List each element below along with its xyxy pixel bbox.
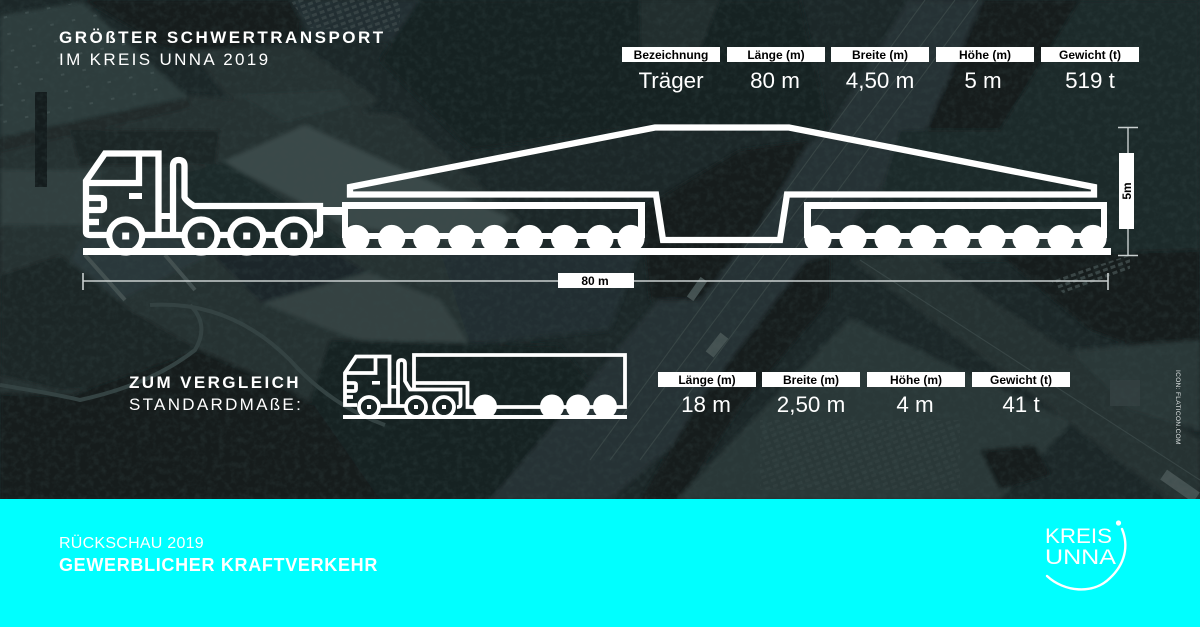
footer text: RÜCKSCHAU 2019: [59, 534, 204, 552]
footer band: [0, 499, 1200, 627]
icon: front trailer: [342, 202, 645, 252]
icon: tractor unit: [86, 154, 346, 252]
dimension: height 5 m: 5m: [1120, 182, 1134, 200]
title: [59, 28, 386, 69]
dimension: length 80 m: [83, 273, 1108, 290]
illustration: heavy transport truck with girder: [83, 128, 1111, 255]
data table: standard truck: 18 m: [681, 392, 731, 417]
data table: standard truck: Höhe (m): [890, 373, 942, 387]
comparison heading: STANDARDMAßE:: [129, 395, 303, 414]
dimension: height 5 m: [1118, 128, 1138, 256]
footer text: GEWERBLICHER KRAFTVERKEHR: [59, 555, 378, 575]
data table: heavy transport: Bezeichnung: [634, 48, 708, 62]
data table: standard truck: 41 t: [1002, 392, 1040, 417]
data table: heavy transport: Länge (m): [747, 48, 805, 62]
data table: heavy transport: Höhe (m): [959, 48, 1011, 62]
logo: Kreis Unna: UNNA: [1045, 546, 1116, 569]
data table: heavy transport: 80 m: [750, 68, 800, 93]
title: IM KREIS UNNA 2019: [59, 50, 270, 69]
ground line: [83, 248, 1111, 255]
logo: Kreis Unna: [1045, 520, 1125, 589]
illustration: standard truck: [343, 355, 627, 419]
data table: heavy transport: 4,50 m: [846, 68, 914, 93]
wheels: [109, 220, 142, 252]
data table: standard truck: Länge (m): [678, 373, 736, 387]
data table: standard truck: Breite (m): [783, 373, 839, 387]
footer text: [59, 534, 378, 575]
dimension: length 80 m: 80 m: [581, 274, 609, 288]
title: GRÖßTER SCHWERTRANSPORT: [59, 28, 386, 47]
data table: heavy transport: 519 t: [1065, 68, 1116, 93]
icon credit: ICON: FLATICON.COM: [1174, 370, 1181, 445]
data table: standard truck: 4 m: [896, 392, 934, 417]
girder load: [350, 128, 1094, 240]
logo: Kreis Unna: KREIS: [1045, 525, 1112, 548]
data table: heavy transport: Gewicht (t): [1059, 48, 1121, 62]
icon: rear trailer: [804, 202, 1107, 252]
data table: standard truck: Gewicht (t): [990, 373, 1052, 387]
data table: heavy transport: Breite (m): [852, 48, 908, 62]
comparison heading: ZUM VERGLEICH: [129, 373, 301, 392]
data table: heavy transport: Träger: [638, 68, 704, 93]
data table: heavy transport: 5 m: [964, 68, 1002, 93]
data table: standard truck: [658, 372, 1070, 417]
comparison heading: [129, 373, 303, 414]
data table: heavy transport: [622, 47, 1139, 93]
data table: standard truck: 2,50 m: [777, 392, 845, 417]
